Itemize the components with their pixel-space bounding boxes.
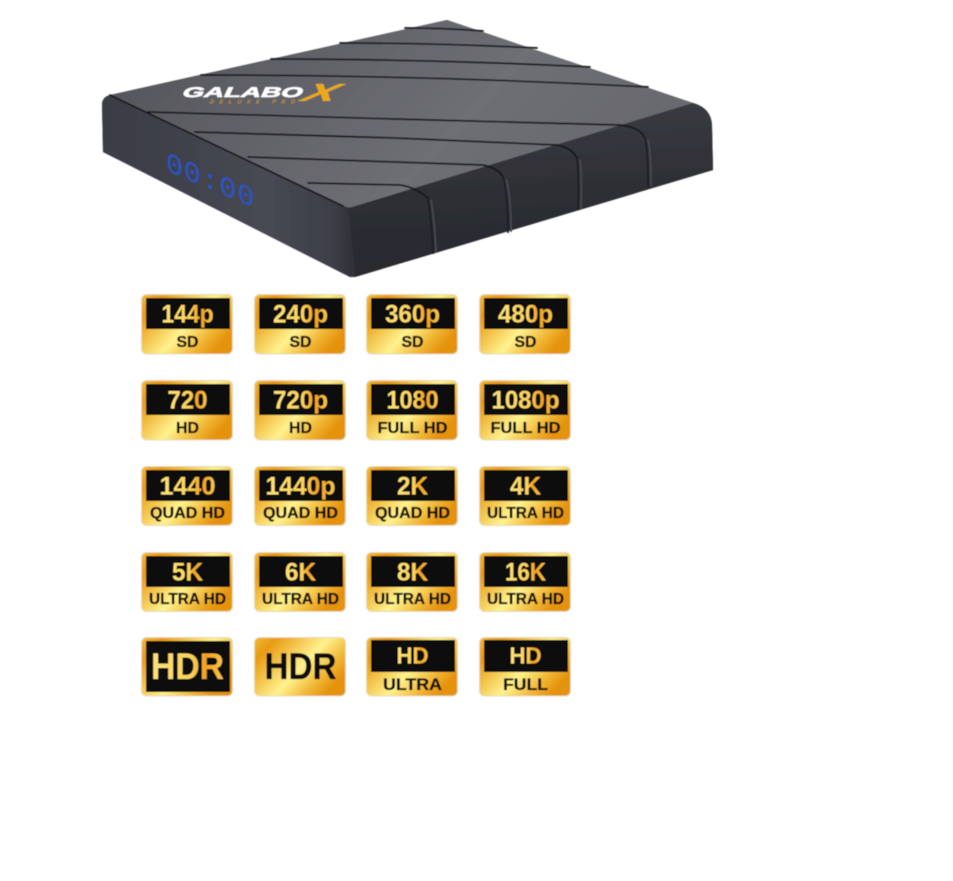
badge: 1440p QUAD HD [254,466,346,526]
badge: 6K ULTRA HD: 6K [285,558,316,586]
badge: 720p HD: HD [289,420,312,437]
badge: 1440 QUAD HD: 1440 [160,472,216,500]
badge: HDR gold [254,638,346,696]
badge: 1440 QUAD HD: QUAD HD [150,505,225,522]
badge: 360p SD: SD [402,334,424,351]
badge: 2K QUAD HD [366,466,458,526]
badge: 360p SD [366,294,458,354]
badge: HD FULL: HD [510,642,542,668]
badge: 1080 FULL HD: 1080 [386,386,438,414]
badge: 720 HD: HD [176,420,199,437]
badge: 1080 FULL HD: FULL HD [378,420,448,437]
box top surface [110,20,693,207]
badge: 16K ULTRA HD: ULTRA HD [487,591,564,608]
front edge grooves [428,138,651,254]
badge: 720p HD [254,380,346,440]
badge: 8K ULTRA HD [366,552,458,612]
badge: HD ULTRA: ULTRA [383,675,442,694]
badge: HD ULTRA: HD [396,642,428,668]
badge: 2K QUAD HD: QUAD HD [375,505,450,522]
badge: 1080p FULL HD: 1080p [492,386,560,414]
badge: 480p SD: SD [514,334,536,351]
badge: HD FULL: FULL [503,675,548,694]
logo: GALABOX DELUXE PRO: DELUXE PRO [209,100,296,105]
box body: left front face [102,95,355,277]
badge: HDR black: HDR [151,646,224,687]
badge: 360p SD: 360p [385,300,440,328]
logo: GALABOX DELUXE PRO: GALABO [179,86,306,101]
badge: 144p SD: SD [176,334,198,351]
badge: HDR black [142,638,232,696]
LED display: 00:00: 00:00 [166,147,254,216]
badge: 6K ULTRA HD [254,552,346,612]
badge: 4K ULTRA HD [480,466,570,526]
badge: HD FULL [480,638,570,696]
badge: 480p SD: 480p [498,300,553,328]
badge: 720 HD: 720 [168,386,208,414]
badge: 1440p QUAD HD: 1440p [266,472,336,500]
badge: 480p SD [480,294,570,354]
box body: base silhouette [102,20,713,277]
badge: 144p SD: 144p [162,300,214,328]
badge: 720p HD: 720p [273,386,328,414]
product: TV box [102,20,713,277]
badge: 5K ULTRA HD: ULTRA HD [149,591,226,608]
badge: 16K ULTRA HD [480,552,570,612]
badge: 1080 FULL HD [366,380,458,440]
badge: 240p SD: 240p [273,300,328,328]
badge: 6K ULTRA HD: ULTRA HD [262,591,339,608]
badge: 240p SD [254,294,346,354]
badge: 5K ULTRA HD: 5K [172,558,203,586]
badge: 720 HD [142,380,232,440]
badge: 1440p QUAD HD: QUAD HD [263,505,338,522]
badge: 1080p FULL HD [480,380,570,440]
badge: 2K QUAD HD: 2K [397,472,428,500]
logo: GALABOX DELUXE PRO [179,79,354,107]
badge: HDR gold: HDR [264,646,336,687]
badge: HD ULTRA [366,638,458,696]
badge: 4K ULTRA HD: 4K [510,472,541,500]
top surface grooves [110,28,648,206]
badge: 1080p FULL HD: FULL HD [490,420,560,437]
badge: 8K ULTRA HD: ULTRA HD [374,591,451,608]
logo: GALABOX DELUXE PRO: X [291,79,354,107]
badge: 5K ULTRA HD [142,552,232,612]
badge: 4K ULTRA HD: ULTRA HD [487,505,564,522]
badge: 240p SD: SD [290,334,312,351]
badge: 16K ULTRA HD: 16K [505,558,546,586]
badge: 8K ULTRA HD: 8K [397,558,428,586]
badge: 1440 QUAD HD [142,466,232,526]
badge: 144p SD [142,294,232,354]
resolution badges grid [142,294,570,696]
box body: right front face [347,103,713,277]
